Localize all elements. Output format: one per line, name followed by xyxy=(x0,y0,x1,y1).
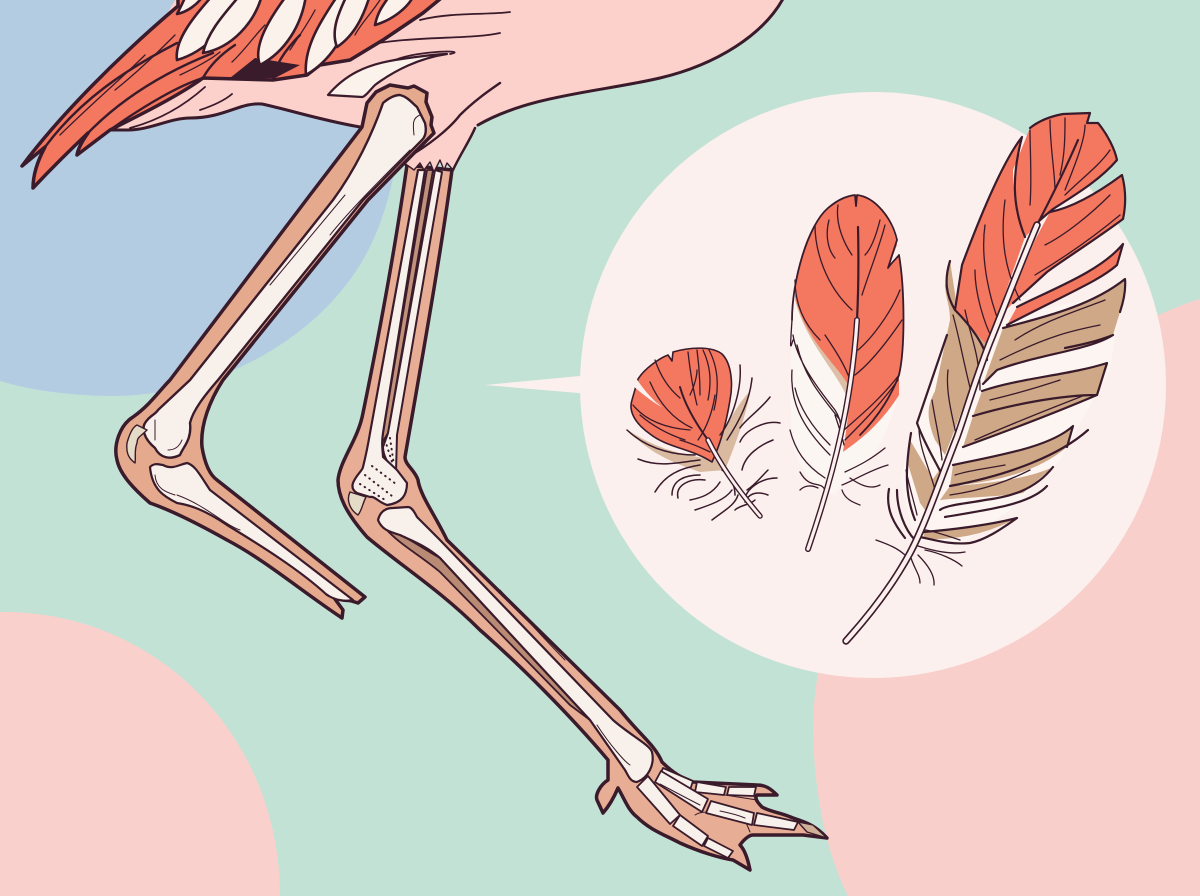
large feather: white under-vane xyxy=(900,290,1123,545)
bone shading lines xyxy=(500,590,745,818)
callout bubble with pointer xyxy=(485,92,1166,678)
background circle: pink right xyxy=(813,299,1200,896)
body: outlines xyxy=(108,0,785,130)
medium feather: white lower vane xyxy=(791,300,898,495)
lower tarsus bone xyxy=(378,507,653,782)
large feather: quill xyxy=(846,140,1078,641)
tibia bone xyxy=(150,463,353,601)
spongy bone dots xyxy=(360,438,412,522)
body: pink plumage xyxy=(100,0,785,172)
large feather xyxy=(846,113,1125,641)
leg flesh outline xyxy=(338,165,827,870)
medium feather: quill xyxy=(808,227,858,549)
small feather: tan and fluff xyxy=(628,392,750,472)
large feather: tan right barbs xyxy=(923,279,1125,539)
body: white tuft feather xyxy=(328,54,447,97)
flamingo body xyxy=(22,0,785,188)
large feather: outline and barbs xyxy=(888,113,1125,543)
small feather xyxy=(627,348,780,520)
back leg: femur and snapped tibia xyxy=(116,85,434,618)
background circle: blue xyxy=(0,0,404,396)
femur: bone detail xyxy=(155,115,420,450)
front leg: tibia and tarsus with foot xyxy=(338,165,827,870)
medium feather: tan edge xyxy=(795,295,850,395)
wing: white coverts xyxy=(177,0,414,75)
femur: white bone xyxy=(144,95,426,458)
medium feather: outline and barbs xyxy=(792,195,904,435)
brown strip xyxy=(385,528,590,720)
tibia end detail xyxy=(155,475,357,602)
background circle: pink bottom left xyxy=(0,612,280,896)
wing: dark gap xyxy=(230,58,300,78)
medium feather: red vane xyxy=(795,195,903,452)
large feather: tan left vane xyxy=(929,261,987,455)
large feather: red upper vanes xyxy=(955,113,1125,345)
wing: feather lines xyxy=(45,30,340,147)
foot bones xyxy=(637,768,798,858)
knee cartilage xyxy=(127,425,147,463)
small feather: barbs xyxy=(633,350,717,452)
stub fringe xyxy=(407,160,453,172)
tarsus bone: second shaft xyxy=(383,170,442,472)
claw: beige nail xyxy=(798,822,827,838)
small feather: red vane xyxy=(631,348,731,462)
body: crease lines xyxy=(403,83,500,160)
small feather: quill xyxy=(680,387,760,516)
wing: red flight feathers xyxy=(22,0,445,188)
medium feather xyxy=(790,195,904,549)
tarsus bone: main shaft and knob xyxy=(352,170,425,505)
back leg flesh xyxy=(116,85,434,618)
ankle cartilage xyxy=(348,492,366,515)
foot webbing fold xyxy=(693,790,757,832)
body: stub above tarsus xyxy=(403,128,475,170)
tarsus: brown tendon xyxy=(382,170,433,443)
